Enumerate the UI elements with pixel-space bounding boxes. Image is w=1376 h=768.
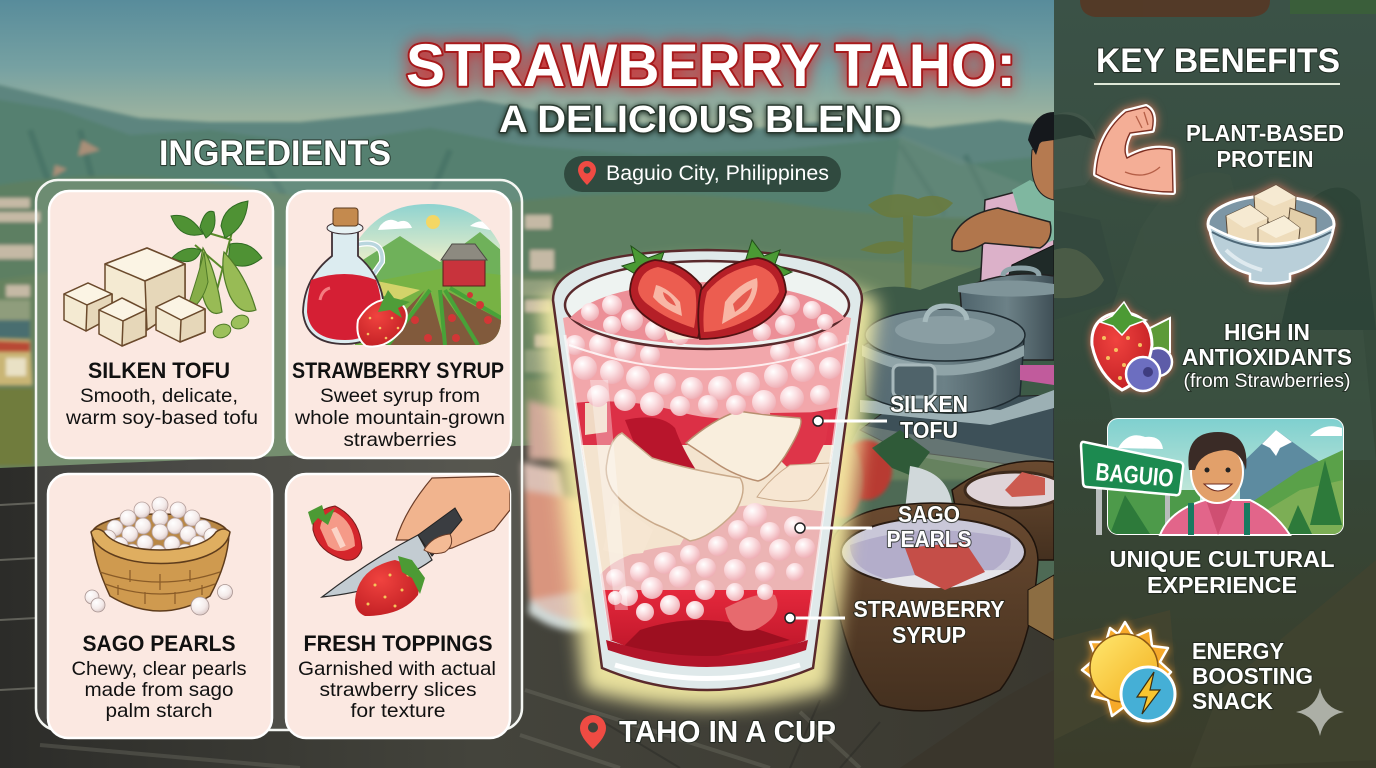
- card text: strawberry syrup: [292, 358, 505, 451]
- icon: sun with bolt: [1082, 622, 1175, 721]
- label: plant-based protein: PLANT-BASED: [1186, 120, 1344, 146]
- callout: strawberry syrup: STRAWBERRY: [854, 596, 1004, 622]
- illustration: strawberry taho glass: [538, 240, 878, 708]
- card text: fresh toppings: strawberry slices: [320, 679, 477, 701]
- icon: knife slicing strawberry: [308, 476, 510, 616]
- card: sago pearls: [48, 474, 272, 738]
- label: unique cultural experience: UNIQUE CULTURAL: [1110, 546, 1334, 572]
- title block: [406, 32, 1016, 192]
- rear bowl: [952, 461, 1054, 560]
- strawberries behind: [850, 425, 1054, 480]
- vendor: [952, 112, 1054, 290]
- callout: strawberry syrup: SYRUP: [892, 622, 966, 648]
- glass body: [553, 250, 862, 690]
- strawberry halves: [622, 240, 792, 339]
- label: plant-based protein: PROTEIN: [1216, 146, 1314, 172]
- card text: strawberry syrup: Sweet syrup from: [320, 385, 480, 407]
- callout: sago pearls: SAGO: [898, 501, 960, 527]
- surface pearls: [581, 292, 833, 345]
- right panel: key benefits: [1054, 0, 1376, 768]
- icon: sparkle mark: [1296, 688, 1344, 736]
- card text: silken tofu: Smooth, delicate,: [80, 385, 238, 407]
- icon: map pin: [578, 161, 596, 185]
- label: high in antioxidants: (from Strawberries): [1184, 371, 1350, 392]
- wooden table: [0, 445, 1060, 768]
- stall: pots and vendor: [823, 112, 1065, 768]
- icon: map pin: [580, 715, 606, 749]
- location pill: Baguio City, Philippines: [606, 162, 829, 185]
- callout: sago pearls: [795, 501, 972, 552]
- faded market background: [1054, 0, 1376, 768]
- syrup layer: [602, 590, 813, 656]
- label: energy boosting snack: [1192, 638, 1313, 714]
- card text: fresh toppings: for texture: [350, 700, 446, 722]
- caption: taho in a cup: TAHO IN A CUP: [619, 714, 836, 749]
- panel: ingredients: [36, 134, 522, 738]
- blurred background cups: [522, 400, 596, 631]
- card: fresh toppings: [286, 474, 510, 738]
- icon: tofu cubes and soybeans: [64, 201, 262, 346]
- heading: key benefits: KEY BENEFITS: [1096, 42, 1340, 80]
- callout: strawberry syrup: [785, 596, 1004, 648]
- tofu chunks: [606, 433, 743, 541]
- card text: strawberry syrup: whole mountain-grown: [294, 407, 505, 429]
- label: unique cultural experience: EXPERIENCE: [1147, 572, 1297, 598]
- card text: silken tofu: SILKEN TOFU: [88, 358, 230, 383]
- pot: [960, 274, 1054, 360]
- glow behind glass: [538, 262, 878, 708]
- icon: tofu bowl: [1208, 185, 1334, 284]
- card text: sago pearls: Chewy, clear pearls: [72, 658, 247, 680]
- benefit: unique cultural experience: [1081, 418, 1344, 598]
- label: energy boosting snack: SNACK: [1192, 688, 1273, 714]
- location pill: [564, 156, 841, 192]
- card text: sago pearls: SAGO PEARLS: [82, 631, 236, 656]
- glass contents: [563, 316, 851, 656]
- label: energy boosting snack: BOOSTING: [1192, 663, 1313, 689]
- icon: strawberry and blueberries: [1092, 302, 1172, 391]
- card text: fresh toppings: [298, 631, 496, 722]
- upper pearls: [565, 332, 841, 416]
- front bowl: [830, 503, 1038, 711]
- card text: silken tofu: [65, 358, 258, 429]
- label: high in antioxidants: HIGH IN: [1224, 319, 1310, 345]
- card text: fresh toppings: Garnished with actual: [298, 658, 496, 680]
- card text: fresh toppings: FRESH TOPPINGS: [304, 631, 492, 656]
- callout: silken tofu: SILKEN: [890, 391, 968, 417]
- benefit: plant-based protein: [1096, 107, 1344, 284]
- label: energy boosting snack: ENERGY: [1192, 638, 1284, 664]
- card text: sago pearls: palm starch: [106, 700, 212, 722]
- callout: sago pearls: PEARLS: [886, 526, 972, 552]
- top of drink in rim: [565, 261, 849, 349]
- main title: STRAWBERRY TAHO:: [406, 32, 1016, 99]
- card: strawberry syrup: [287, 191, 511, 458]
- benefit: energy boosting snack: [1082, 622, 1313, 721]
- subtitle: A DELICIOUS BLEND: [499, 99, 902, 141]
- callout: silken tofu: [813, 391, 968, 443]
- card text: sago pearls: [72, 631, 247, 722]
- card text: strawberry syrup: strawberries: [344, 429, 457, 451]
- label: high in antioxidants: ANTIOXIDANTS: [1182, 344, 1352, 370]
- benefit: high in antioxidants: [1092, 302, 1352, 392]
- icon: flexed arm: [1096, 107, 1173, 192]
- lower pearl bed: [600, 505, 824, 590]
- card text: strawberry syrup: STRAWBERRY SYRUP: [292, 358, 504, 383]
- frame: [36, 180, 522, 730]
- label: plant-based protein: [1186, 120, 1344, 172]
- label: high in antioxidants: [1182, 319, 1352, 392]
- card: silken tofu: [49, 191, 273, 458]
- glass bottom: [560, 640, 860, 700]
- icon: basket of sago pearls: [85, 497, 232, 615]
- lower pearls: [606, 503, 815, 621]
- label: unique cultural experience: [1110, 546, 1334, 598]
- icon: syrup bottle with strawberry farm: [303, 204, 501, 347]
- card text: silken tofu: warm soy-based tofu: [65, 407, 258, 429]
- illustration: Baguio sign and smiling man: BAGUIO: [1094, 458, 1175, 493]
- illustration: Baguio sign and smiling man: [1081, 418, 1344, 535]
- callout: silken tofu: TOFU: [900, 417, 958, 443]
- card text: sago pearls: made from sago: [84, 679, 234, 701]
- heading: ingredients: INGREDIENTS: [159, 134, 391, 173]
- glass highlights: [565, 335, 849, 678]
